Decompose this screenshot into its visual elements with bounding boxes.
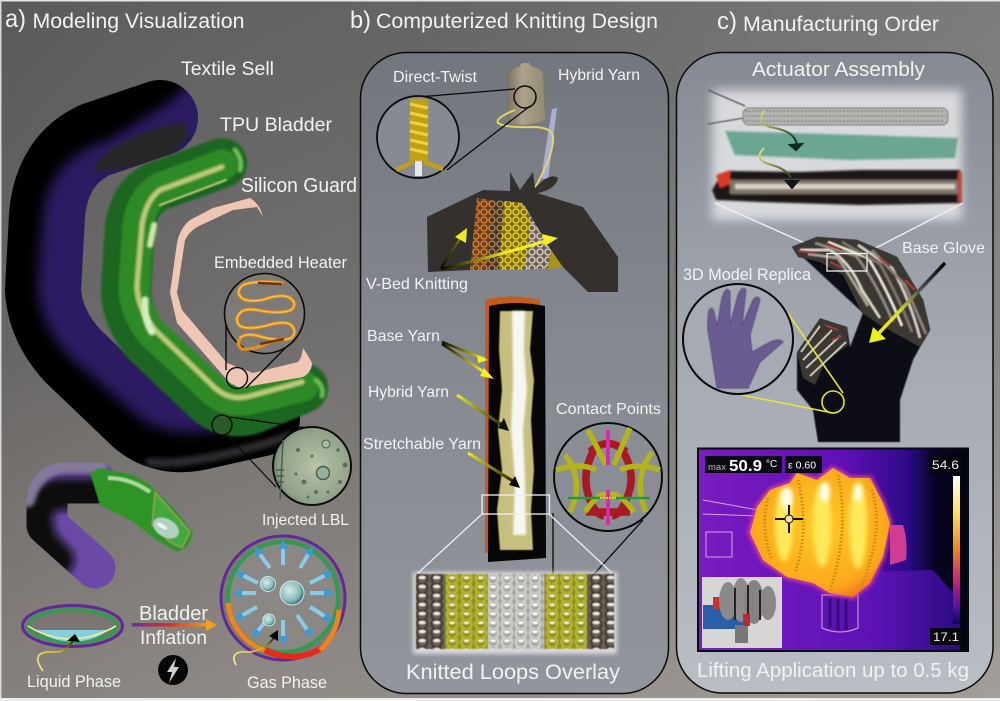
liquid phase diagram: Liquid Phase [27,673,121,691]
v-bed knitting label and arrows [366,228,558,293]
thermal image [698,448,968,651]
glove zoom rectangle [827,254,867,271]
heading b: Computerized Knitting Design [376,9,658,33]
heading c: c) [717,8,737,35]
TPU bladder label: TPU Bladder [220,114,332,136]
v-bed knitting label and arrows: V-Bed Knitting [366,276,468,293]
thermal floor [699,570,960,650]
direct-twist callout [377,96,459,178]
embedded heater callout [214,253,347,388]
yarn cone with hybrid yarn [418,63,557,188]
max temperature readout: max [708,462,726,473]
knitted loops overlay [413,572,617,654]
base glove label and arrow: Base Glove [902,240,985,257]
injected LBL callout: Injected LBL [262,512,349,529]
base yarn label and arrows [367,328,494,379]
icon: lightning bolt [158,655,188,685]
silicon guard label: Silicon Guard [241,175,357,197]
panel c: manufacturing order [676,52,993,693]
gas phase diagram: Gas Phase [247,674,327,692]
lifting application caption: Lifting Application up to 0.5 kg [697,660,969,682]
knitted strip [485,296,546,562]
knitted loops overlay caption: Knitted Loops Overlay [406,659,620,684]
bladder inflation arrow [132,603,217,649]
gas phase diagram [221,536,345,692]
base yarn label and arrows: Base Yarn [367,328,440,345]
heater wire [708,90,948,125]
base glove label and arrow [869,240,985,343]
max temperature readout: ε 0.60 [788,460,816,472]
thermal crosshair [775,505,803,533]
textile shell label: Textile Sell [181,59,274,80]
cut-away finger model [26,462,194,588]
injected LBL callout [212,415,351,529]
textile shell layer [5,80,300,472]
temperature scale: 17.1 [933,630,959,644]
max temperature readout: 50.9 [729,458,762,475]
panel a: modeling visualization [0,5,357,692]
actuator assembly heading: Actuator Assembly [752,58,926,81]
thermal hot actuator [750,468,907,632]
knitted actuator strip [712,170,962,205]
direct-twist label: Direct-Twist [393,69,478,86]
bladder inflation arrow: Inflation [140,628,207,649]
3D model replica callout [683,265,844,413]
zoom frame on glove [715,203,963,253]
liquid phase diagram [22,606,122,691]
contact points callout [552,423,662,599]
hybrid yarn label and arrow [368,384,509,431]
actuator assembly photo [708,90,962,220]
zoom frame on strip [418,495,612,573]
v-bed knit sample [427,172,618,292]
heading a: Modeling Visualization [32,9,244,33]
temperature scale: 54.6 [932,458,959,472]
3D model replica callout: 3D Model Replica [683,265,812,284]
bladder inflation arrow: Bladder [139,603,208,625]
stretchable yarn label and arrow [363,436,520,488]
contact points label: Contact Points [556,401,661,418]
knitted glove [792,237,930,442]
hybrid yarn label and arrow: Hybrid Yarn [368,384,449,401]
panel b: computerized knitting design [360,52,668,694]
bladder strip [725,131,958,160]
assembly arrows [760,111,802,188]
inset photo of lifting actuator [702,577,782,648]
max temperature readout: °C [766,459,777,470]
TPU bladder layer [126,150,322,411]
silicon guard layer [170,198,312,388]
max temperature readout [705,456,822,475]
heading a: a) [5,5,26,33]
temperature scale [929,456,962,645]
stretchable yarn label and arrow: Stretchable Yarn [363,436,481,453]
heading b: b) [350,7,371,34]
heading c: Manufacturing Order [743,12,939,36]
embedded heater callout: Embedded Heater [214,253,347,272]
hybrid yarn label top: Hybrid Yarn [558,67,640,84]
